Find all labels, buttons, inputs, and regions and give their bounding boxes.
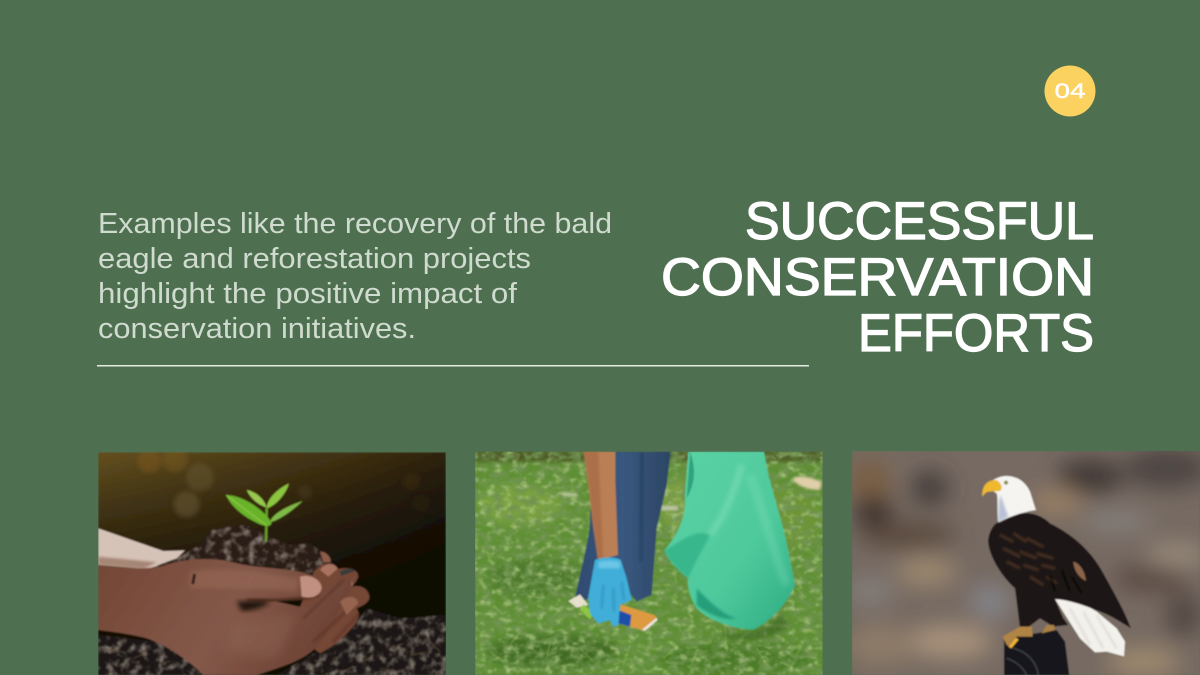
- head: [993, 476, 1036, 522]
- title: [661, 192, 1094, 363]
- photo: volunteer collecting litter on grass: [475, 450, 823, 675]
- seedling: [226, 483, 303, 542]
- tail: [1055, 599, 1125, 656]
- body: [988, 513, 1131, 628]
- ground soil: [98, 608, 446, 675]
- back fingers: [320, 552, 331, 562]
- photo: seedling in cupped hands: [98, 446, 446, 675]
- main hand: [98, 559, 352, 675]
- legs: [1003, 627, 1033, 647]
- back arm: [98, 528, 185, 569]
- photo: bald eagle perched on post: [847, 448, 1200, 675]
- body text: [98, 208, 612, 345]
- body text: eagle and reforestation projects: [98, 243, 531, 275]
- badge: section number 04: 04: [1054, 80, 1086, 103]
- body text: Examples like the recovery of the bald: [98, 208, 612, 240]
- post: [1004, 630, 1069, 675]
- badge: section number 04: [1044, 66, 1096, 116]
- title: EFFORTS: [858, 304, 1094, 363]
- bag: [665, 452, 795, 630]
- title: SUCCESSFUL: [745, 192, 1094, 251]
- body text: conservation initiatives.: [98, 313, 416, 345]
- box: [618, 604, 657, 630]
- arm: [584, 452, 618, 560]
- body text: highlight the positive impact of: [98, 278, 517, 310]
- soil mound in hand: [157, 525, 327, 573]
- divider line: [97, 365, 809, 366]
- title: CONSERVATION: [661, 248, 1094, 307]
- glove: [588, 557, 632, 627]
- jeans: [575, 452, 671, 602]
